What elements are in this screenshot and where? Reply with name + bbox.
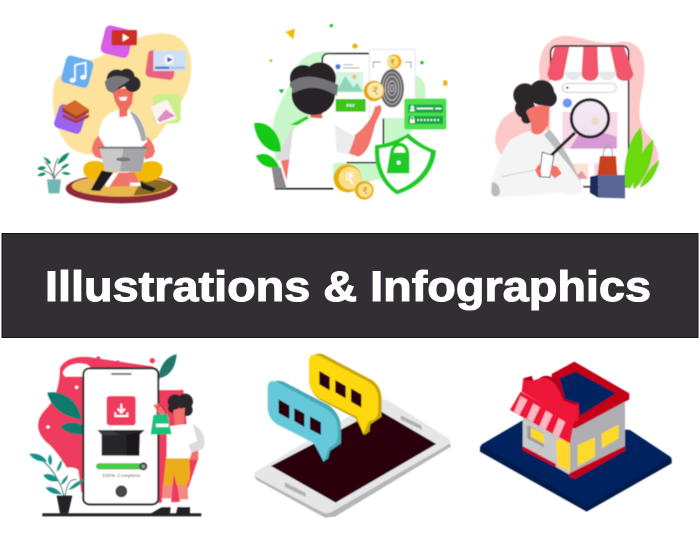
yellow bubble <box>309 354 382 435</box>
rug <box>66 174 178 203</box>
white clouds <box>46 356 180 495</box>
fingerprint card <box>369 49 415 118</box>
shopping bag <box>597 145 617 176</box>
pay button: PAY <box>346 103 356 108</box>
progress label: 100% Complete <box>102 473 140 478</box>
illustration: isometric phone with chat bubbles <box>254 354 451 518</box>
banner <box>2 234 698 338</box>
plant <box>254 123 287 188</box>
person <box>83 69 163 192</box>
illustration: online shop on phone with magnifier <box>491 36 659 198</box>
tablet <box>254 399 451 518</box>
phone <box>275 53 383 189</box>
hand with phone <box>535 152 562 178</box>
download icon <box>107 396 136 425</box>
progress bar <box>96 462 147 470</box>
magnifier <box>552 100 609 155</box>
icon: video play tile <box>100 24 137 59</box>
person <box>491 80 583 197</box>
avatar dot <box>563 98 572 108</box>
plant <box>37 153 71 193</box>
rupee coins large: ₹ <box>362 186 368 196</box>
phone <box>527 46 629 187</box>
home button <box>116 486 127 497</box>
red background blob <box>38 357 198 505</box>
search bar <box>563 83 616 92</box>
green background blob <box>272 51 426 183</box>
plant <box>29 454 85 513</box>
box <box>590 175 625 198</box>
pink background blob <box>495 36 658 186</box>
icon: music note tile <box>60 55 94 89</box>
striped awning <box>510 392 574 443</box>
person from behind <box>276 62 382 187</box>
awning <box>547 47 633 81</box>
icon: image tile <box>151 94 181 125</box>
rupee coins large: ₹ <box>345 171 355 188</box>
illustration: app download on phone <box>29 354 205 516</box>
title: Illustrations & Infographics <box>45 263 651 311</box>
flat roof <box>552 362 629 429</box>
sign front <box>522 376 578 422</box>
icon: books tile <box>53 100 89 135</box>
illustration: secure payment with fingerprint <box>254 24 448 200</box>
windows and door <box>527 424 619 472</box>
shield with padlock <box>375 133 436 194</box>
blue bubble <box>268 381 341 462</box>
illustration: isometric store <box>480 362 672 512</box>
floor line <box>42 513 201 516</box>
rupee coins small: ₹ <box>372 86 379 98</box>
rupee coins large <box>334 164 374 200</box>
person with bag <box>151 394 205 514</box>
base platform <box>480 420 672 512</box>
leaves left <box>47 392 83 434</box>
leaf top right <box>158 354 177 378</box>
open box <box>97 430 145 456</box>
rupee coins small: ₹ <box>390 57 396 67</box>
yellow background blob <box>53 34 191 155</box>
confetti dots <box>270 24 448 94</box>
plant <box>624 127 659 188</box>
product image card <box>562 112 617 149</box>
rupee coins small <box>364 54 402 101</box>
illustration: person learning on laptop with media icons <box>37 24 191 203</box>
product thumbnails <box>572 163 604 179</box>
store walls <box>523 400 625 479</box>
icon: video player tile <box>145 49 186 81</box>
phone <box>83 368 158 504</box>
pay button <box>336 99 366 112</box>
login card <box>404 99 446 129</box>
